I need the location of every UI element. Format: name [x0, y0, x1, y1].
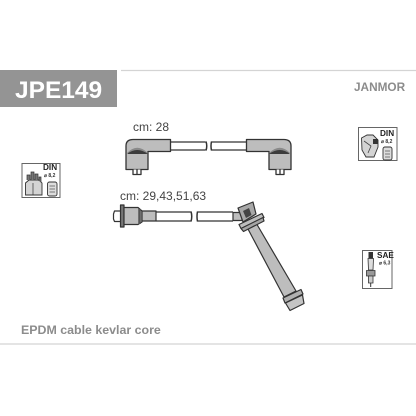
icon: SAE spark plug: ⌀ 6,3	[379, 260, 391, 266]
spark plug boot	[233, 202, 304, 310]
icon: DIN distributor left: DIN	[43, 163, 57, 172]
right cable segment	[211, 142, 246, 150]
right angled boot	[246, 140, 291, 174]
header badge: JPE149: JPE149	[15, 77, 102, 104]
label: lower cable lengths: cm: 29,43,51,63	[120, 189, 206, 203]
left cable segment	[171, 142, 206, 150]
icon: DIN coil right: ⌀ 8,2	[381, 139, 393, 145]
distributor end connector	[114, 205, 156, 227]
lower cable diagram	[114, 202, 304, 310]
footer description: EPDM cable kevlar core	[21, 323, 161, 337]
icon: DIN coil right	[358, 128, 397, 160]
header badge: JPE149	[0, 70, 117, 107]
top cable diagram	[126, 140, 291, 174]
icon: DIN coil right: DIN	[380, 129, 394, 138]
left angled boot	[126, 140, 170, 174]
brand name: JANMOR	[354, 80, 406, 94]
label: top cable length: cm: 28	[133, 120, 169, 134]
icon: DIN distributor left	[22, 163, 60, 198]
icon: DIN distributor left: ⌀ 8,2	[44, 173, 56, 179]
lower cable segments	[156, 212, 233, 221]
icon: SAE spark plug	[362, 250, 394, 288]
icon: SAE spark plug: SAE	[377, 251, 394, 260]
